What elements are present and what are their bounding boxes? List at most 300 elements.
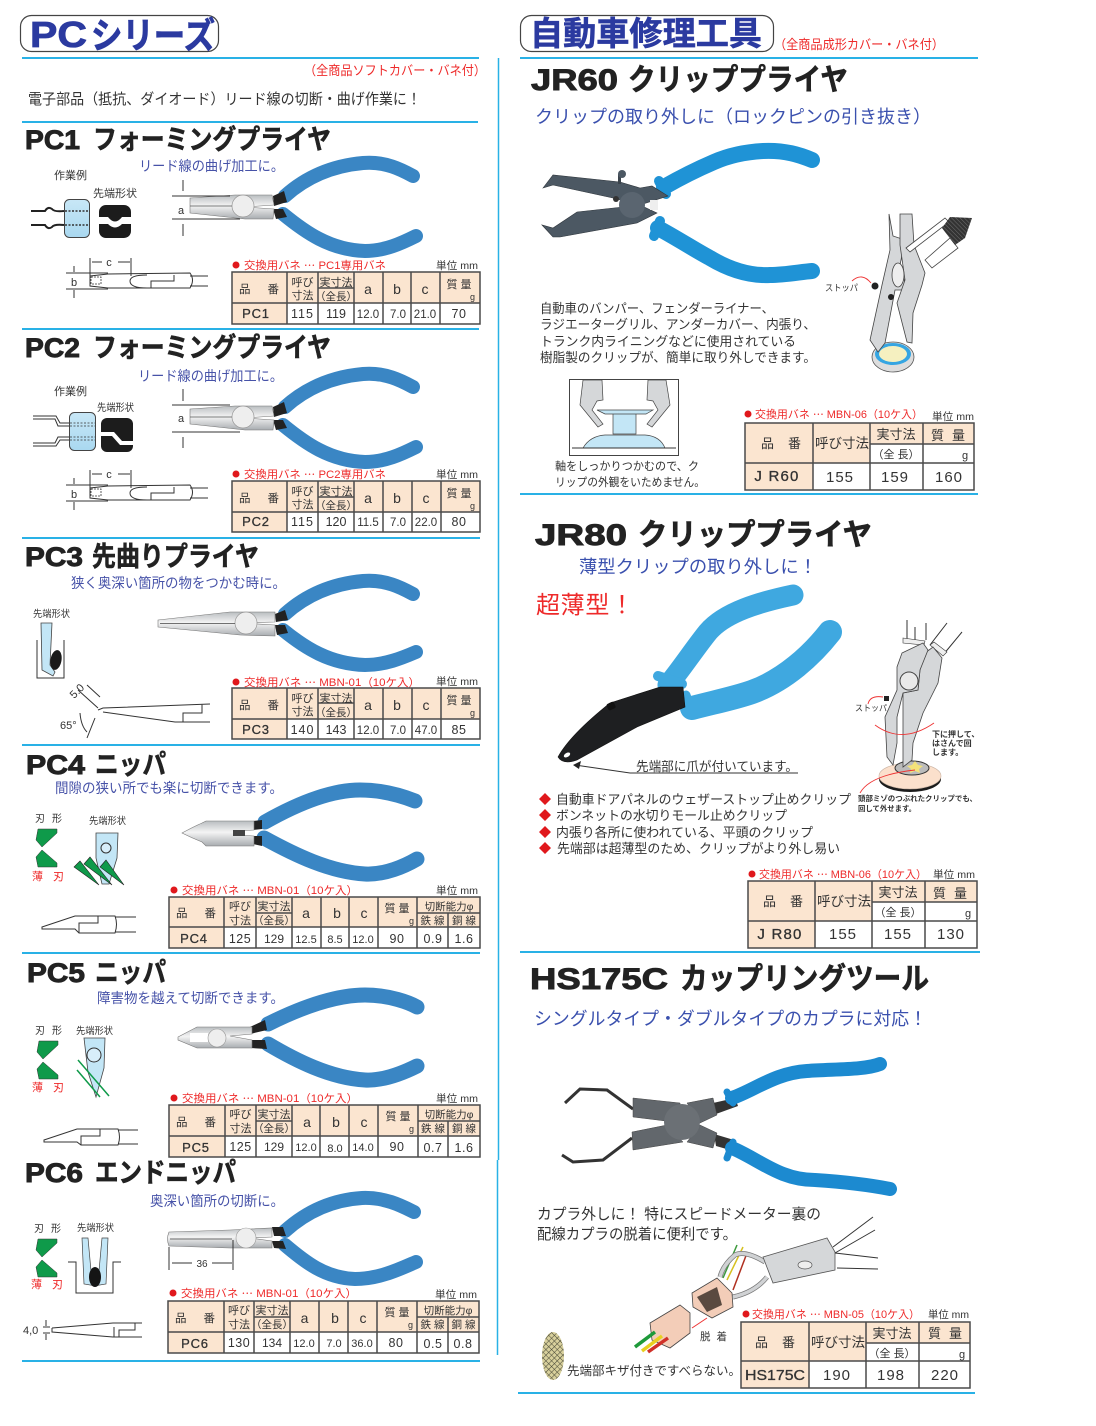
intro text: 電子部品（抵抗、ダイオード）リード線の切断・曲げ作業に！ bbox=[28, 91, 421, 108]
spec table: PC4 bbox=[169, 897, 480, 948]
panel: PC6 bbox=[23, 1158, 479, 1353]
side drawing bbox=[23, 1320, 142, 1340]
title: PC series: PC bbox=[30, 14, 87, 55]
tip shape bbox=[93, 186, 137, 238]
spec table: PC1: g bbox=[470, 292, 475, 302]
spring label: 単位 mm bbox=[435, 1288, 477, 1301]
dimension drawing: b bbox=[71, 489, 77, 501]
dimension drawing bbox=[66, 257, 208, 298]
spring label: 単位 mm bbox=[933, 868, 975, 881]
spec table: HS175C: 品 番 bbox=[755, 1335, 795, 1350]
angle drawing bbox=[60, 682, 210, 738]
spec table: PC3: 品 番 bbox=[239, 699, 280, 712]
spec table: PC4: 0.9 bbox=[424, 932, 442, 946]
spec table: PC2: 80 bbox=[452, 515, 466, 529]
usage illustration: JR80: 下に押して、 bbox=[932, 729, 979, 739]
spec table: PC2: g bbox=[470, 501, 475, 511]
usage illustration: JR60 bbox=[825, 214, 972, 372]
spec table: PC4: 寸法 bbox=[229, 913, 251, 927]
spring label: 交換用バネ … MBN-01（10ケ入） bbox=[182, 882, 358, 898]
description text: トランク内ライニングなどに使用されている bbox=[540, 334, 796, 349]
usage illustration: JR80: ストッパ bbox=[855, 703, 887, 713]
spec table: PC3: 質 量 bbox=[446, 693, 472, 707]
heading: PC3 bbox=[25, 542, 259, 572]
panel: PC3 bbox=[25, 542, 480, 739]
tip shape: 先端形状 bbox=[77, 1222, 114, 1234]
work example bbox=[33, 384, 96, 450]
pliers: PC5 bbox=[178, 995, 417, 1080]
description text: カプラ外しに！ 特にスピードメーター裏の bbox=[537, 1206, 821, 1223]
spec table: PC5: c bbox=[360, 1114, 368, 1130]
spec table: HS175C: 実寸法 bbox=[872, 1326, 912, 1341]
panel: JR80 bbox=[535, 519, 979, 948]
spec table: PC5: 12.0 bbox=[295, 1142, 317, 1154]
spec table: PC5: 鉄 線 bbox=[421, 1122, 445, 1135]
spec table: JR60: 質量 bbox=[931, 428, 965, 443]
spring label: 交換用バネ … MBN-01（10ケ入） bbox=[181, 1285, 357, 1301]
spec table: PC6: 質 量 bbox=[384, 1305, 410, 1319]
work example: 作業例 bbox=[54, 168, 87, 182]
panel: PC1 bbox=[25, 124, 480, 324]
inset caption bbox=[555, 459, 705, 489]
spec table: PC5: 切断能力φ bbox=[425, 1108, 474, 1121]
spec table: HS175C: 190 bbox=[823, 1367, 851, 1384]
blade shape: 薄刃 bbox=[32, 869, 64, 883]
spring label: 単位 mm bbox=[928, 1308, 969, 1321]
subheading: JR60: クリップの取り外しに（ロックピンの引き抜き） bbox=[535, 107, 931, 127]
spec table: PC6: 134 bbox=[262, 1336, 282, 1350]
description text: 配線カプラの脱着に便利です。 bbox=[537, 1226, 737, 1243]
spec table: PC6: a bbox=[301, 1310, 309, 1326]
spec table: HS175C bbox=[741, 1322, 970, 1388]
connector illustration bbox=[635, 1217, 878, 1352]
work example bbox=[31, 168, 90, 238]
spec table: JR60: 155 bbox=[826, 469, 854, 486]
blade shape bbox=[32, 1025, 64, 1094]
spring label: 単位 mm bbox=[436, 468, 478, 481]
spec table: HS175C: （全 長） bbox=[868, 1346, 916, 1360]
spec table: PC4: c bbox=[360, 905, 368, 921]
spec table: PC5: a bbox=[303, 1114, 311, 1130]
spec table: PC6: 銅 線 bbox=[452, 1318, 476, 1331]
heading: PC1 bbox=[25, 124, 331, 155]
spec table: JR60: g bbox=[962, 450, 968, 462]
tip shape: 先端形状 bbox=[93, 186, 137, 200]
spec table: PC3: b bbox=[393, 697, 401, 713]
spec table: PC3: 47.0 bbox=[415, 725, 437, 737]
spec table: PC1: 115 bbox=[291, 307, 314, 321]
subheading: PC3: 狭く奥深い箇所の物をつかむ時に。 bbox=[71, 575, 286, 591]
inset caption: リップの外観をいためません。 bbox=[555, 475, 705, 489]
spec table: PC5: 129 bbox=[264, 1140, 284, 1154]
usage illustration: JR80: はさんで回 bbox=[932, 739, 972, 748]
spec table: PC2: c bbox=[422, 490, 430, 506]
spec table: PC4: 12.5 bbox=[295, 934, 317, 946]
note: molded cover: （全商品成形カバー・バネ付） bbox=[774, 37, 944, 52]
spec table: PC6: c bbox=[360, 1310, 366, 1326]
spring label: 交換用バネ … PC1専用バネ bbox=[244, 257, 386, 273]
dimension drawing: b bbox=[71, 277, 77, 289]
spring label bbox=[744, 406, 974, 423]
mesh tip detail bbox=[542, 1332, 741, 1380]
usage illustration: JR80: します。 bbox=[932, 748, 963, 757]
heading: PC3: PC3 bbox=[25, 542, 83, 572]
spec table: PC2: 寸法 bbox=[292, 497, 314, 511]
spec table: PC5: b bbox=[332, 1114, 340, 1130]
tip shape bbox=[74, 815, 126, 885]
work example: 作業例 bbox=[54, 384, 87, 398]
spec table: PC1: a bbox=[364, 281, 372, 297]
spec table: PC4: 8.5 bbox=[327, 934, 343, 946]
spec table: PC1: 119 bbox=[326, 307, 346, 321]
spec table: JR80 bbox=[748, 881, 977, 948]
angle drawing: 65° bbox=[60, 720, 77, 732]
spring label: 交換用バネ … MBN-01（10ケ入） bbox=[244, 674, 420, 690]
spring label bbox=[170, 882, 478, 898]
spec table: PC6: 実寸法 bbox=[256, 1303, 288, 1317]
heading: PC5: ニッパ bbox=[95, 958, 166, 988]
spec table: PC2: 120 bbox=[326, 515, 346, 529]
tip shape: 先端形状 bbox=[89, 815, 126, 827]
subheading: HS175C: シングルタイプ・ダブルタイプのカプラに対応！ bbox=[534, 1008, 927, 1029]
heading: PC4: ニッパ bbox=[95, 750, 166, 780]
spec table: PC3: 呼び bbox=[292, 692, 314, 705]
spec table: PC5: 実寸法 bbox=[258, 1107, 290, 1121]
spec table: JR80: 実寸法 bbox=[878, 885, 918, 900]
tip shape bbox=[76, 1025, 113, 1097]
heading: HS175C: HS175C bbox=[530, 963, 668, 996]
spec table: PC5: 銅 線 bbox=[452, 1122, 476, 1135]
panel: PC2 bbox=[25, 332, 480, 532]
spec table: PC2: PC2 bbox=[242, 514, 270, 529]
blade shape bbox=[31, 1223, 63, 1291]
spec table: PC4: 12.0 bbox=[352, 934, 374, 946]
spec table: PC4: g bbox=[409, 916, 414, 926]
description text: ラジエーターグリル、アンダーカバー、内張り、 bbox=[540, 317, 816, 332]
spec table: PC5: 1.6 bbox=[455, 1141, 473, 1155]
spec table: PC1: 実寸法 bbox=[320, 275, 352, 289]
blade shape: 刃形 bbox=[34, 1223, 61, 1235]
subheading: PC1: リード線の曲げ加工に。 bbox=[139, 158, 284, 174]
spec table: PC6: 切断能力φ bbox=[424, 1304, 473, 1317]
spec table: PC3: a bbox=[364, 697, 372, 713]
spec table: PC4: 質 量 bbox=[384, 901, 410, 915]
spec table: PC5: 品 番 bbox=[176, 1116, 216, 1129]
spec table: PC5: 寸法 bbox=[230, 1121, 252, 1135]
tip shape bbox=[68, 1222, 121, 1293]
spring label bbox=[170, 1090, 478, 1106]
spec table: JR60: （全 長） bbox=[872, 447, 920, 461]
spring label bbox=[232, 257, 478, 273]
pliers: PC6 bbox=[168, 1198, 416, 1279]
pliers: HS175C bbox=[562, 1064, 890, 1189]
spec table: PC5: 呼び bbox=[230, 1108, 252, 1121]
tip shape: 先端形状 bbox=[76, 1025, 113, 1037]
spec table: PC6: PC6 bbox=[181, 1336, 209, 1351]
heading: JR60 bbox=[531, 64, 848, 97]
tip shape bbox=[33, 608, 70, 678]
spring label: 交換用バネ … MBN-06（10ケ入） bbox=[755, 406, 923, 422]
pliers: PC2: a bbox=[178, 413, 185, 425]
panel: PC4 bbox=[26, 750, 480, 948]
heading: PC2 bbox=[25, 332, 331, 363]
heading: PC5: PC5 bbox=[27, 958, 85, 988]
spec table: PC4: 銅 線 bbox=[452, 914, 476, 927]
spec table: JR60: 160 bbox=[935, 469, 963, 486]
pliers: PC3 bbox=[158, 581, 416, 665]
spec table: PC4: 実寸法 bbox=[258, 899, 290, 913]
spec table: PC3: 寸法 bbox=[292, 704, 314, 718]
heading: PC2: フォーミングプライヤ bbox=[93, 332, 331, 363]
spec table: PC3: 実寸法 bbox=[320, 691, 352, 705]
subheading: PC4: 間隙の狭い所でも楽に切断できます。 bbox=[55, 780, 283, 796]
description text: 樹脂製のクリップが、簡単に取り外しできます。 bbox=[540, 350, 816, 365]
spec table: PC4: （全長） bbox=[253, 914, 295, 927]
spec table: PC4: 切断能力φ bbox=[425, 900, 474, 913]
spec table: PC3: 12.0 bbox=[357, 725, 379, 737]
heading: PC2: PC2 bbox=[25, 333, 80, 363]
spec table: PC1 bbox=[232, 272, 480, 324]
spec table: PC2: 22.0 bbox=[415, 517, 437, 529]
spring label: 単位 mm bbox=[436, 259, 478, 272]
heading: PC6: PC6 bbox=[25, 1158, 83, 1188]
spec table: PC4: 129 bbox=[264, 932, 284, 946]
callout: ultra thin: 超薄型！ bbox=[536, 592, 634, 619]
spec table: JR60: 実寸法 bbox=[876, 427, 916, 442]
spring label: 単位 mm bbox=[932, 410, 974, 423]
spec table: PC3: 85 bbox=[452, 723, 466, 737]
spec table: PC1: PC1 bbox=[242, 306, 270, 321]
spec table: PC6: 寸法 bbox=[228, 1317, 250, 1331]
spec table: HS175C: 呼び寸法 bbox=[811, 1335, 865, 1350]
heading: JR80 bbox=[535, 519, 872, 552]
description text bbox=[540, 301, 816, 365]
spec table: PC5: 質 量 bbox=[385, 1109, 411, 1123]
spec table: PC1: 70 bbox=[452, 307, 466, 321]
spec table: PC4: 品 番 bbox=[176, 907, 216, 920]
spec table: PC5: 125 bbox=[229, 1140, 252, 1154]
pliers: PC2 bbox=[172, 374, 416, 462]
callout: tip claw: 先端部に爪が付いています。 bbox=[636, 759, 798, 774]
spec table: HS175C: g bbox=[959, 1349, 965, 1361]
spec table: PC3: （全長） bbox=[315, 706, 357, 719]
spring label bbox=[232, 466, 478, 482]
spec table: PC6 bbox=[168, 1301, 479, 1353]
blade shape: 刃形 bbox=[35, 1025, 62, 1037]
spec table: PC4: a bbox=[302, 905, 310, 921]
spec table: PC3: 140 bbox=[291, 723, 314, 737]
spec table: PC1: 12.0 bbox=[357, 309, 379, 321]
spec table: PC5: 14.0 bbox=[352, 1142, 374, 1154]
spring label: 交換用バネ … MBN-01（10ケ入） bbox=[182, 1090, 358, 1106]
bullet list: 先端部は超薄型のため、クリップがより外し易い bbox=[557, 841, 840, 856]
spec table: PC4: 呼び bbox=[229, 900, 251, 913]
spec table: JR60: 品 番 bbox=[761, 436, 801, 451]
spec table: JR80: 155 bbox=[829, 926, 857, 943]
spring label bbox=[232, 674, 478, 690]
spec table: JR80: 質量 bbox=[933, 886, 967, 901]
heading: PC1: フォーミングプライヤ bbox=[93, 124, 331, 155]
spec table: PC2: 実寸法 bbox=[320, 484, 352, 498]
spec table: PC5: （全長） bbox=[253, 1122, 295, 1135]
inset: grip diagram bbox=[570, 380, 678, 456]
spec table: HS175C: 198 bbox=[877, 1367, 905, 1384]
spec table: PC4: b bbox=[333, 905, 341, 921]
spec table: PC6: g bbox=[408, 1320, 413, 1330]
spec table: PC1: 呼び bbox=[292, 276, 314, 289]
spec table: PC6: 7.0 bbox=[326, 1338, 342, 1350]
spec table: PC5: PC5 bbox=[182, 1140, 210, 1155]
heading: PC3: 先曲りプライヤ bbox=[92, 542, 259, 572]
note: all products soft cover: （全商品ソフトカバー・バネ付） bbox=[304, 63, 486, 78]
title: PC series bbox=[20, 14, 218, 56]
spec table: PC2: 品 番 bbox=[239, 492, 280, 505]
spring label: 単位 mm bbox=[436, 884, 478, 897]
heading: PC4 bbox=[26, 750, 166, 780]
heading: JR60: JR60 bbox=[531, 64, 618, 97]
heading: PC4: PC4 bbox=[26, 750, 85, 780]
spec table: PC3: 7.0 bbox=[390, 725, 406, 737]
usage illustration: JR80 bbox=[855, 620, 979, 793]
panel: JR60 bbox=[531, 64, 974, 490]
pliers: JR60 bbox=[542, 151, 812, 275]
spec table: HS175C: 質量 bbox=[928, 1326, 962, 1341]
heading: PC6: エンドニッパ bbox=[95, 1158, 236, 1188]
dimension drawing bbox=[66, 469, 208, 510]
spec table: PC4: 90 bbox=[390, 932, 404, 946]
dimension drawing: c bbox=[106, 469, 112, 481]
spec table: PC6: 呼び bbox=[228, 1304, 250, 1317]
spec table: JR80: 155 bbox=[884, 926, 912, 943]
panel: PC5 bbox=[27, 958, 480, 1157]
note: flat head clip: 回して外せます。 bbox=[858, 803, 916, 813]
description text bbox=[537, 1206, 821, 1243]
pliers: PC4 bbox=[182, 790, 417, 874]
heading: JR80: クリッププライヤ bbox=[638, 519, 872, 552]
spring label: 単位 mm bbox=[436, 1092, 478, 1105]
spec table: PC4: PC4 bbox=[180, 931, 208, 946]
bullet list: 内張り各所に使われている、平頭のクリップ bbox=[556, 825, 813, 840]
subheading: JR80: 薄型クリップの取り外しに！ bbox=[579, 557, 817, 577]
spec table: PC2: （全長） bbox=[315, 499, 357, 512]
subheading: PC6: 奥深い箇所の切断に。 bbox=[150, 1193, 284, 1209]
spec table: PC1: 21.0 bbox=[414, 309, 436, 321]
spec table: PC5: 8.0 bbox=[327, 1143, 343, 1155]
spec table: PC6: 0.8 bbox=[454, 1337, 472, 1351]
dimension drawing: c bbox=[106, 257, 112, 269]
spring label: 交換用バネ … MBN-06（10ケ入） bbox=[759, 866, 927, 882]
spec table: PC6: b bbox=[331, 1310, 339, 1326]
subheading: PC5: 障害物を越えて切断できます。 bbox=[97, 990, 284, 1006]
subheading: PC2: リード線の曲げ加工に。 bbox=[138, 368, 283, 384]
spec table: JR60: 159 bbox=[881, 469, 909, 486]
blade shape: 刃形 bbox=[35, 813, 62, 825]
spec table: PC1: 品 番 bbox=[239, 283, 280, 296]
spec table: PC3: PC3 bbox=[242, 722, 270, 737]
spec table: JR80: g bbox=[965, 908, 971, 920]
spec table: PC6: 12.0 bbox=[293, 1338, 315, 1350]
note: flat head clip: 頭部ミゾのつぶれたクリップでも、 bbox=[858, 793, 977, 803]
spec table: PC1: （全長） bbox=[315, 290, 357, 303]
spring label: 交換用バネ … PC2専用バネ bbox=[244, 466, 386, 482]
spec table: PC1: 質 量 bbox=[446, 277, 472, 291]
note: flat head clip bbox=[858, 793, 977, 813]
spec table: PC6: 130 bbox=[228, 1336, 250, 1350]
heading: JR60: クリッププライヤ bbox=[628, 64, 848, 97]
spec table: PC1: 寸法 bbox=[292, 288, 314, 302]
description text: 自動車のバンパー、フェンダーライナー、 bbox=[540, 301, 774, 316]
inset caption: 軸をしっかりつかむので、ク bbox=[555, 459, 699, 473]
connector illustration: 脱着 bbox=[700, 1330, 727, 1343]
spec table: PC2: 呼び bbox=[292, 485, 314, 498]
spec table: JR60 bbox=[745, 423, 974, 490]
spec table: PC3: 143 bbox=[326, 723, 346, 737]
spec table: HS175C: 220 bbox=[931, 1367, 959, 1384]
spec table: PC4: 125 bbox=[229, 932, 251, 946]
spec table: JR80: 呼び寸法 bbox=[817, 894, 871, 909]
pliers: JR80 bbox=[558, 595, 830, 762]
panel: HS175C bbox=[530, 963, 970, 1388]
heading: PC5 bbox=[27, 958, 166, 988]
spec table: PC3: g bbox=[470, 708, 475, 718]
heading: HS175C bbox=[530, 963, 929, 996]
spec table: HS175C: HS175C bbox=[745, 1368, 805, 1384]
blade shape: 薄刃 bbox=[31, 1277, 63, 1291]
spec table: PC6: （全長） bbox=[251, 1318, 293, 1331]
tip shape: 先端形状 bbox=[97, 401, 134, 414]
side drawing: 4,0 bbox=[23, 1325, 38, 1337]
mesh tip detail: 先端部キザ付きですべらない。 bbox=[567, 1364, 741, 1378]
spec table: PC6: 品 番 bbox=[175, 1312, 216, 1325]
spec table: PC6: 36.0 bbox=[351, 1338, 373, 1350]
spec table: JR60: 呼び寸法 bbox=[815, 436, 869, 451]
tip shape bbox=[97, 401, 134, 452]
spec table: PC1: c bbox=[422, 281, 428, 297]
spec table: JR60: J R60 bbox=[754, 468, 800, 485]
heading: PC1: PC1 bbox=[25, 125, 80, 155]
spec table: PC2 bbox=[232, 481, 480, 532]
title: PC series: シリーズ bbox=[91, 15, 215, 56]
side drawing bbox=[44, 1129, 138, 1145]
pliers: PC6: 36 bbox=[196, 1259, 208, 1270]
spec table: PC2: 115 bbox=[291, 515, 314, 529]
spec table: PC5 bbox=[169, 1105, 480, 1157]
spec table: PC5: g bbox=[409, 1124, 414, 1134]
spec table: PC2: a bbox=[364, 490, 372, 506]
pliers: PC1 bbox=[172, 163, 416, 251]
bullet list: 自動車ドアパネルのウェザーストップ止めクリップ bbox=[556, 792, 851, 807]
usage illustration: JR60: ストッパ bbox=[825, 283, 858, 293]
spec table: PC2: b bbox=[393, 490, 401, 506]
spec table: PC1: b bbox=[393, 281, 401, 297]
pliers: PC1: a bbox=[178, 205, 185, 217]
spring label bbox=[170, 1285, 477, 1301]
blade shape: 薄刃 bbox=[32, 1080, 64, 1094]
bullet list bbox=[539, 792, 851, 856]
spec table: JR80: （全 長） bbox=[874, 905, 922, 919]
side drawing bbox=[42, 916, 136, 933]
spec table: PC5: 0.7 bbox=[424, 1141, 442, 1155]
bullet list: ボンネットの水切りモール止めクリップ bbox=[556, 808, 787, 823]
heading: JR80: JR80 bbox=[535, 519, 627, 552]
spec table: PC3: c bbox=[422, 697, 430, 713]
tip shape: 先端形状 bbox=[33, 608, 70, 620]
spec table: PC6: 80 bbox=[389, 1336, 403, 1350]
spring label: 交換用バネ … MBN-05（10ケ入） bbox=[752, 1306, 920, 1322]
spec table: PC3 bbox=[232, 688, 480, 739]
heading: PC6 bbox=[25, 1158, 236, 1188]
spec table: JR80: 品 番 bbox=[763, 894, 803, 909]
